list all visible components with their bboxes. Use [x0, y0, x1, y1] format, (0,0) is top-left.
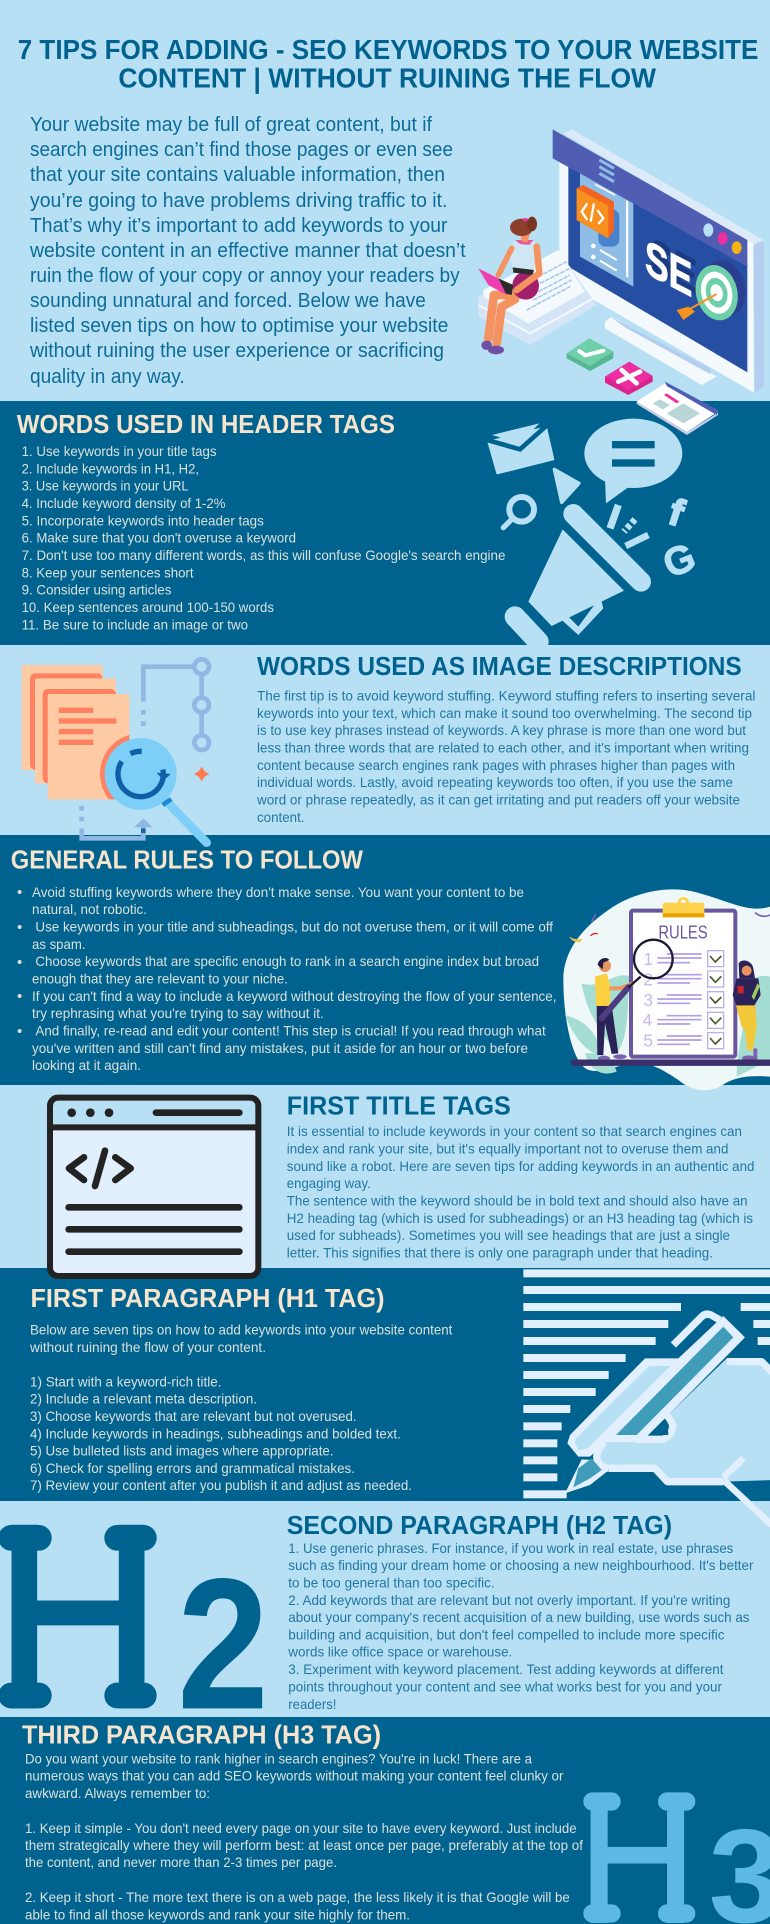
- hand fill: [597, 1358, 770, 1482]
- paragraph with numbered tips: 3) Choose keywords that are relevant but not overused.: [30, 1409, 357, 1424]
- paragraph: individual words. Lastly, avoid repeating keywords too often, if you use the same: [257, 775, 733, 790]
- bullet list: you've written and still can't find any mistakes, put it aside for an hour or two before: [32, 1041, 528, 1056]
- heading: WORDS USED IN HEADER TAGS: [17, 409, 395, 439]
- heading: FIRST TITLE TAGS: [287, 1090, 511, 1120]
- intro paragraph: listed seven tips on how to optimise your website: [30, 315, 448, 337]
- panel: first title tags: [0, 1085, 770, 1276]
- heading: SECOND PARAGRAPH (H2 TAG): [287, 1510, 672, 1540]
- pen body: [567, 1314, 745, 1457]
- pen nib: [565, 1458, 609, 1493]
- paragraph: points throughout your content and see what works best for you and your: [288, 1680, 722, 1694]
- numbered list: 3. Use keywords in your URL: [22, 479, 189, 494]
- paragraph with numbered tips: 5) Use bulleted lists and images where appropriate.: [30, 1444, 334, 1459]
- icon: large H2: [0, 1472, 269, 1762]
- icon: sparkle: [194, 767, 209, 781]
- bullet list: Use keywords in your title and subheadings, but do not overuse them, or it will come off: [35, 920, 553, 934]
- paragraph: 2. Keep it short - The more text there is on a web page, the less likely it is that Google will be: [25, 1890, 570, 1905]
- paragraph: keywords into your text, which can make it sound too overwhelming. The second tip: [257, 706, 752, 721]
- paragraph: less than three words that are related to each other, and it's important when writing: [257, 740, 749, 756]
- paragraph: used for subheads). Sometimes you will see headings that are just a single: [287, 1228, 730, 1243]
- icon: envelope: [485, 423, 553, 473]
- leaves: [565, 975, 770, 1077]
- paragraph: [287, 1124, 754, 1260]
- heading: WORDS USED AS IMAGE DESCRIPTIONS: [257, 651, 742, 681]
- numbered list: [22, 444, 506, 632]
- paragraph with numbered tips: 2) Include a relevant meta description.: [30, 1392, 257, 1407]
- paragraph: is to use key phrases instead of keywords. A key phrase is more than one word but: [257, 723, 746, 738]
- checklist numbers: [643, 949, 653, 1051]
- intro paragraph: sounding unnatural and forced. Below we have: [30, 290, 426, 312]
- woman with book: [733, 961, 761, 1061]
- numbered list: 7. Don't use too many different words, as this will confuse Google's search engine: [22, 548, 506, 563]
- numbered list: 6. Make sure that you don't overuse a keyword: [22, 531, 296, 546]
- check boxes: [708, 951, 724, 1049]
- paragraph: building and acquisition, but don't feel compelled to include more specific: [288, 1627, 725, 1642]
- bullet list: [18, 885, 557, 1073]
- cross button: [605, 362, 653, 395]
- intro paragraph: you’re going to have problems driving traffic to it.: [30, 190, 447, 212]
- paragraph: It is essential to include keywords in your content so that search engines can: [287, 1124, 742, 1139]
- numbered list: 10. Keep sentences around 100-150 words: [22, 600, 274, 615]
- bullet list: natural, not robotic.: [32, 902, 147, 917]
- paragraph with numbered tips: 1) Start with a keyword-rich title.: [30, 1374, 222, 1389]
- confetti: [569, 913, 770, 942]
- intro paragraph: without ruining the user experience or sacrificing: [29, 340, 444, 362]
- bullet list: And finally, re-read and edit your content! This step is crucial! If you read through what: [35, 1024, 546, 1038]
- title: CONTENT | WITHOUT RUINING THE FLOW: [118, 62, 656, 94]
- paragraph: sound like a robot. Here are seven tips for adding keywords in an authentic and: [287, 1159, 754, 1174]
- paragraph: able to find all those keywords and rank your site highly for them.: [25, 1907, 410, 1922]
- hand outline: [597, 1362, 770, 1482]
- man with magnifier: [595, 940, 673, 1061]
- illustration: megaphone with marketing icons: [485, 419, 702, 642]
- paragraph with numbered tips: without ruining the flow of your content.: [29, 1340, 266, 1355]
- numbered list: 9. Consider using articles: [22, 583, 171, 598]
- icon: code browser window: [50, 1098, 258, 1276]
- paragraph: content because search engines rank pages with phrases higher than pages with: [257, 758, 735, 773]
- bullet list: Choose keywords that are specific enough to rank in a search engine index but broad: [35, 954, 539, 969]
- icon: magnifier: [503, 497, 534, 528]
- checklist numbers: 3: [643, 990, 653, 1010]
- document stack: [22, 665, 130, 800]
- paragraph: 1. Use generic phrases. For instance, if you work in real estate, use phrases: [288, 1541, 733, 1556]
- blob backdrop: [563, 889, 770, 1090]
- intro paragraph: Your website may be full of great content, but if: [30, 114, 432, 136]
- paragraph: engaging way.: [287, 1176, 371, 1191]
- intro paragraph: quality in any way.: [30, 366, 185, 388]
- paragraph: awkward. Always remember to:: [25, 1786, 210, 1801]
- checklist numbers: 4: [643, 1010, 653, 1030]
- paragraph with numbered tips: 4) Include keywords in headings, subheadings and bolded text.: [30, 1426, 401, 1442]
- numbered list: 8. Keep your sentences short: [22, 565, 194, 580]
- bullet list: try rephrasing what you're trying to say without it.: [32, 1006, 324, 1021]
- paragraph: 3. Experiment with keyword placement. Test adding keywords at different: [288, 1662, 724, 1677]
- numbered list: 5. Incorporate keywords into header tags: [22, 513, 264, 528]
- check button: [567, 338, 613, 371]
- panel: words used as image descriptions: [0, 645, 770, 843]
- paper stack: [478, 250, 597, 345]
- paragraph: words like office space or warehouse.: [287, 1645, 512, 1660]
- heading: THIRD PARAGRAPH (H3 TAG): [22, 1720, 381, 1750]
- connector path: [82, 659, 209, 838]
- clipboard: RULES: [658, 921, 708, 942]
- SE lettering: SE: [645, 229, 692, 308]
- paragraph: word or phrase repeatedly, as it can get irritating and put readers off your website: [256, 792, 740, 808]
- intro paragraph: ruin the flow of your copy or annoy your readers by: [30, 265, 460, 287]
- heading: GENERAL RULES TO FOLLOW: [11, 844, 363, 874]
- checklist numbers: 2: [643, 970, 653, 990]
- icon: megaphone: [515, 505, 648, 642]
- numbered list: 2. Include keywords in H1, H2,: [22, 461, 199, 476]
- illustration: documents with magnifier: [22, 659, 209, 843]
- paragraph with numbered tips: 6) Check for spelling errors and grammatical mistakes.: [30, 1461, 355, 1476]
- intro paragraph: [29, 114, 466, 388]
- paragraph: letter. This signifies that there is only one paragraph under that heading.: [287, 1246, 713, 1260]
- paragraph with numbered tips: 7) Review your content after you publish it and adjust as needed.: [30, 1478, 412, 1493]
- clipboard: [631, 897, 735, 1057]
- bullet list: Avoid stuffing keywords where they don't make sense. You want your content to be: [32, 885, 524, 900]
- paragraph: Do you want your website to rank higher in search engines? You're in luck! There are a: [25, 1751, 532, 1766]
- bullet list: looking at it again.: [32, 1058, 141, 1073]
- paragraph: The first tip is to avoid keyword stuffing. Keyword stuffing refers to inserting several: [257, 688, 755, 704]
- panel: general rules to follow: [0, 835, 770, 1090]
- intro paragraph: search engines can’t find those pages or even see: [30, 139, 453, 161]
- panel: words used in header tags: [16, 414, 695, 645]
- floor line: [574, 1053, 770, 1072]
- illustration: SEO monitor with woman on laptop: [478, 129, 764, 435]
- panel: first paragraph (H1 tag): [0, 1268, 770, 1525]
- numbered list: 1. Use keywords in your title tags: [22, 444, 217, 459]
- panel: third paragraph (H3 tag): [0, 1717, 770, 1924]
- text stripes: [523, 1269, 770, 1498]
- panel: hero introduction: [0, 0, 770, 435]
- target with arrow: [677, 256, 751, 325]
- icon: speech bubble: [584, 419, 682, 503]
- paragraph: [287, 1541, 754, 1712]
- title: [18, 34, 758, 94]
- panel: second paragraph (H2 tag): [0, 1472, 770, 1762]
- checklist numbers: 1: [643, 949, 653, 969]
- intro paragraph: That’s why it’s important to add keywords to your: [30, 215, 448, 237]
- checklist lines: [657, 954, 702, 1044]
- bullet list: enough that they are relevant to your niche.: [32, 972, 288, 986]
- woman with laptop: [478, 217, 539, 354]
- icon: large H3: [578, 1754, 770, 1924]
- illustration: rules clipboard with people: [563, 889, 770, 1090]
- paragraph: H2 heading tag (which is used for subheadings) or an H3 heading tag (which is: [287, 1211, 753, 1226]
- icon: triangle: [554, 469, 579, 502]
- magnifier: [105, 738, 207, 843]
- icon: letter G: G: [657, 534, 702, 587]
- paragraph: about your company's recent acquisition of a new building, use words such as: [288, 1610, 750, 1625]
- dark finger gap: [648, 1422, 668, 1435]
- icon: large H2: 2: [177, 1541, 269, 1749]
- paragraph: them strategically where they will perform best: at least once per page, preferably at the top of: [25, 1838, 583, 1853]
- paragraph: [25, 1751, 583, 1922]
- illustration: hand writing with pen: [523, 1269, 770, 1525]
- SE lettering: SE: [650, 226, 697, 305]
- paragraph with numbered tips: [29, 1323, 453, 1493]
- small document: [637, 382, 718, 435]
- bullet list: as spam.: [32, 937, 86, 952]
- paragraph: the content, and never more than 2-3 times per page.: [25, 1855, 337, 1870]
- paragraph: readers!: [288, 1697, 336, 1712]
- paragraph: 2. Add keywords that are relevant but not overly important. If you're writing: [288, 1593, 730, 1608]
- paragraph: 1. Keep it simple - You don't need every page on your site to have every keyword. Just include: [25, 1821, 577, 1836]
- thumb line: [723, 1458, 770, 1525]
- bullet list: If you can't find a way to include a keyword without destroying the flow of your sentence,: [32, 989, 556, 1004]
- paragraph: The sentence with the keyword should be in bold text and should also have an: [287, 1194, 748, 1208]
- paragraph: index and rank your site, but it's equally important not to overuse them and: [287, 1142, 728, 1156]
- paragraph: to be too general than too specific.: [288, 1575, 495, 1590]
- intro paragraph: that your site contains valuable information, then: [30, 164, 445, 186]
- paragraph: [256, 688, 755, 825]
- numbered list: 4. Include keyword density of 1-2%: [22, 496, 225, 511]
- monitor: [553, 129, 764, 393]
- monitor stand: [605, 317, 717, 385]
- intro paragraph: website content in an effective manner that doesn’t: [29, 240, 466, 262]
- paragraph with numbered tips: Below are seven tips on how to add keywords into your website content: [30, 1323, 453, 1338]
- checklist numbers: 5: [643, 1031, 653, 1051]
- paragraph: such as finding your dream home or choosing a new neighbourhood. It's better: [288, 1558, 754, 1573]
- paragraph: content.: [257, 810, 304, 825]
- paragraph: numerous ways that you can add SEO keywords without making your content feel clunky or: [25, 1769, 564, 1784]
- numbered list: 11. Be sure to include an image or two: [22, 617, 248, 632]
- icon: letter f: f: [664, 490, 690, 534]
- heading: FIRST PARAGRAPH (H1 TAG): [30, 1283, 384, 1313]
